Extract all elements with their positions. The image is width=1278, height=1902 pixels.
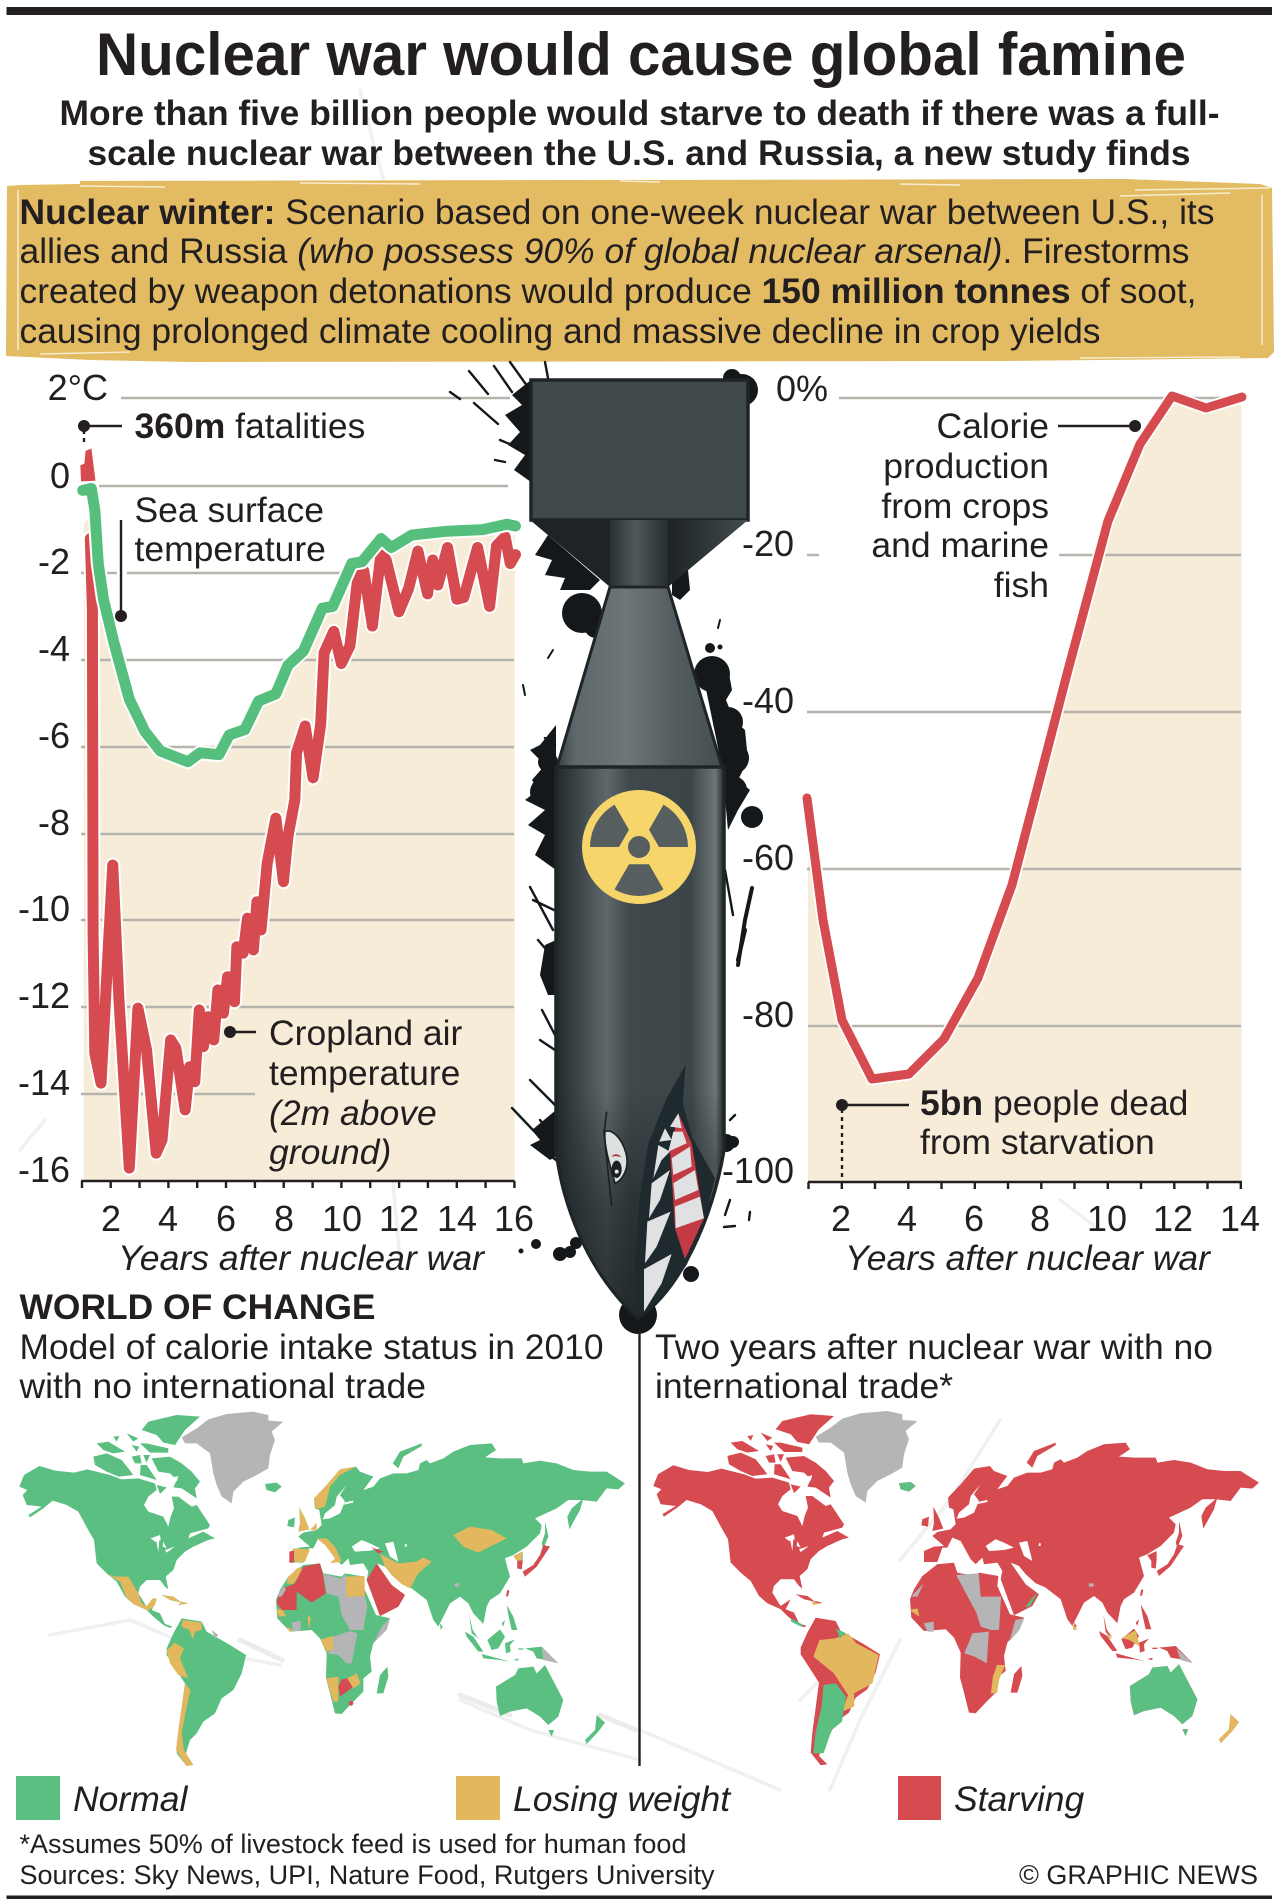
chart: temperature [18, 367, 534, 1278]
callout: calorie production: Calorie [937, 406, 1049, 446]
callout: calorie production: and marine [871, 525, 1049, 565]
top rule [6, 7, 1272, 15]
panel: nuclear winter: causing prolonged climate cooling and massive decline in crop yields [20, 311, 1100, 351]
axis values: -14 [18, 1062, 70, 1103]
callout: calorie production: fish [994, 565, 1049, 605]
callout: 5bn people dead: 5bn people dead [920, 1083, 1188, 1123]
x axis years [101, 1198, 534, 1239]
x axis years: 10 [322, 1198, 362, 1239]
callout: 5bn people dead [836, 1083, 1188, 1180]
callout: 360m fatalities: 360m fatalities [134, 406, 365, 446]
map divider [638, 1330, 641, 1766]
shark mouth [635, 1065, 715, 1315]
calorie x axis years: 14 [1220, 1198, 1260, 1239]
calorie x axis years: 12 [1153, 1198, 1193, 1239]
calorie gridlines [807, 398, 1241, 1026]
calorie x axis years: 8 [1030, 1198, 1050, 1239]
bomb neck [610, 520, 668, 587]
right axis values: -60 [742, 837, 794, 878]
bottom rule [6, 1896, 1272, 1899]
axis values: -10 [18, 888, 70, 929]
calorie x axis years: 10 [1087, 1198, 1127, 1239]
panel: nuclear winter: allies and Russia (who possess 90% of global nuclear arsenal). Firestorms [20, 231, 1190, 271]
temperature x axis [81, 1181, 514, 1188]
bomb fins [530, 520, 610, 587]
calorie x axis [808, 1182, 1242, 1189]
calorie x axis years: 6 [964, 1198, 984, 1239]
sea surface temperature line [83, 489, 515, 762]
x axis years: 2 [101, 1198, 121, 1239]
axis values: -2 [38, 541, 70, 582]
legend: normal [16, 1776, 189, 1820]
temperature gridlines [81, 398, 514, 1094]
legend: losing weight: Losing weight [513, 1779, 732, 1819]
right map recovering regions [899, 1482, 1239, 1743]
callout: calorie production [871, 406, 1141, 605]
right axis values: -80 [742, 994, 794, 1035]
text: left map caption: Model of calorie intake status in 2010 [20, 1327, 604, 1367]
calorie x axis years [831, 1198, 1260, 1239]
callout: cropland air temperature [224, 1013, 463, 1172]
heading: world of change: WORLD OF CHANGE [20, 1287, 376, 1327]
text: right map caption [655, 1327, 1213, 1406]
x axis years: 14 [437, 1198, 477, 1239]
title: Nuclear war would cause global famine [96, 21, 1186, 88]
bomb body [556, 767, 724, 1318]
calorie chart area [808, 396, 1242, 1182]
x axis title: Years after nuclear war [118, 1238, 486, 1278]
footnote: *Assumes 50% of livestock feed is used for human food [20, 1829, 686, 1859]
legend: starving: Starving [954, 1779, 1084, 1819]
callout: calorie production: production [883, 446, 1049, 486]
axis values: -6 [38, 715, 70, 756]
subtitle: More than five billion people would starve to death if there was a full- [60, 94, 1220, 133]
right axis values: -40 [742, 680, 794, 721]
panel: nuclear winter [6, 179, 1274, 362]
cropland air temperature line [80, 449, 515, 1168]
axis values: -16 [18, 1149, 70, 1190]
shark eye [604, 1112, 627, 1207]
callout: cropland air temperature: temperature [269, 1053, 460, 1093]
axis values: -8 [38, 802, 70, 843]
axis values [18, 367, 108, 1190]
text: right map caption: Two years after nuclear war with no [655, 1327, 1213, 1367]
axis values: -4 [38, 628, 70, 669]
americas status overlay [107, 1574, 218, 1766]
calorie line [807, 396, 1242, 1079]
right axis values [722, 368, 828, 1191]
calorie x axis title: Years after nuclear war [845, 1238, 1212, 1278]
right axis values: 0% [776, 368, 828, 409]
chart: calorie production [807, 396, 1260, 1278]
text: left map caption: with no international trade [18, 1366, 426, 1406]
legend: normal: Normal [73, 1779, 189, 1819]
x axis years: 12 [379, 1198, 419, 1239]
panel: nuclear winter: Nuclear winter: Scenario based on one-week nuclear war between U.S., its [20, 192, 1214, 232]
icon: nuclear bomb [530, 380, 748, 1318]
credit: © GRAPHIC NEWS [1019, 1860, 1258, 1890]
subtitle [60, 94, 1220, 173]
text: right map caption: international trade* [655, 1366, 953, 1406]
icon: radiation symbol [582, 790, 696, 904]
ink splatter behind bomb [450, 362, 763, 1334]
callout: cropland air temperature: ground) [269, 1132, 391, 1172]
legend: starving [898, 1776, 1084, 1820]
callout: sea surface temperature: Sea surface [134, 490, 324, 530]
calorie x axis years: 2 [831, 1198, 851, 1239]
right axis values: -100 [722, 1150, 794, 1191]
callout: cropland air temperature: (2m above [269, 1093, 437, 1133]
axis values: 2°C [48, 367, 108, 408]
subtitle: scale nuclear war between the U.S. and Russia, a new study finds [88, 134, 1190, 173]
axis values: -12 [18, 975, 70, 1016]
callout: cropland air temperature: Cropland air [269, 1013, 463, 1053]
panel: nuclear winter: created by weapon detonations would produce 150 million tonnes of soot, [20, 271, 1196, 311]
map: calorie status in 2010 [19, 1412, 625, 1766]
callout: sea surface temperature [115, 490, 326, 622]
callout: 5bn people dead: from starvation [920, 1122, 1155, 1162]
x axis years: 6 [216, 1198, 236, 1239]
callout: calorie production: from crops [881, 486, 1049, 526]
temperature chart area [84, 510, 515, 1180]
callout: sea surface temperature: temperature [134, 529, 326, 569]
bomb shoulder [557, 587, 722, 767]
legend [16, 1776, 1084, 1820]
right map status overlay [791, 1573, 1193, 1753]
text: left map caption [18, 1327, 604, 1406]
x axis years: 16 [494, 1198, 534, 1239]
x axis years: 8 [274, 1198, 294, 1239]
axis values: 0 [50, 455, 70, 496]
bomb tail box [531, 380, 748, 520]
right axis values: -20 [742, 523, 794, 564]
x axis years: 4 [158, 1198, 178, 1239]
old world status overlay [276, 1467, 558, 1706]
map: two years after nuclear war [653, 1411, 1259, 1765]
sources: Sources: Sky News, UPI, Nature Food, Rutgers University [20, 1860, 715, 1890]
calorie x axis years: 4 [897, 1198, 917, 1239]
